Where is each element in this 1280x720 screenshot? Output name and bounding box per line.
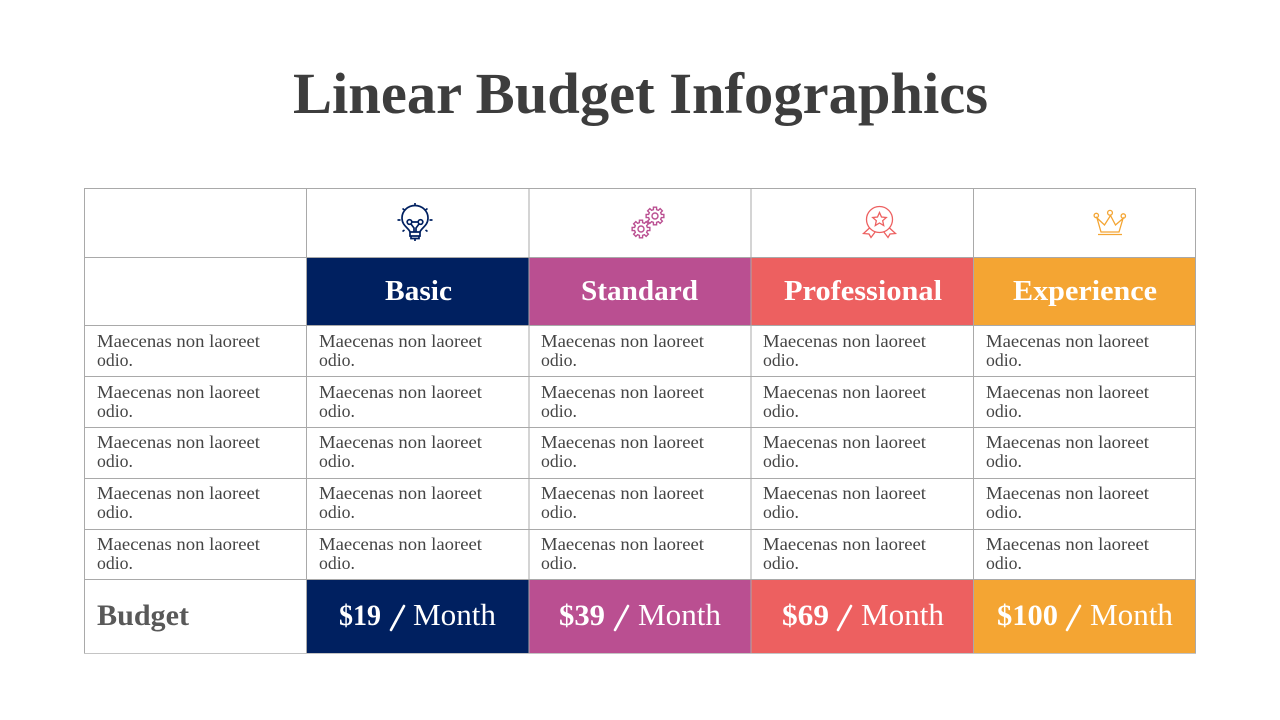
row 4 text xyxy=(97,483,1149,522)
row 3 text: Maecenas non laoreet xyxy=(319,432,482,452)
price: Professional: Month xyxy=(861,597,944,632)
budget row xyxy=(97,580,1196,654)
row 4 text: Maecenas non laoreet xyxy=(319,483,482,503)
row 1 text: odio. xyxy=(319,350,355,370)
price: Professional: $69 xyxy=(782,599,829,632)
row 3 text: odio. xyxy=(97,451,133,471)
title: Linear Budget Infographics xyxy=(293,61,988,126)
row 2 text: odio. xyxy=(763,401,799,421)
price: Standard: $39 xyxy=(559,599,605,632)
price: Basic: $19 xyxy=(339,599,381,632)
header: Professional xyxy=(751,258,974,326)
icon: award ribbon xyxy=(864,206,896,238)
price: Experience xyxy=(974,580,1196,654)
row 2 text: odio. xyxy=(97,401,133,421)
row 5 text: Maecenas non laoreet xyxy=(541,534,704,554)
row 4 text: Maecenas non laoreet xyxy=(97,483,260,503)
row 5 text: Maecenas non laoreet xyxy=(319,534,482,554)
price: Basic: Month xyxy=(413,597,496,632)
row 1 text: odio. xyxy=(986,350,1022,370)
row 4 text: Maecenas non laoreet xyxy=(541,483,704,503)
header: Experience: Experience xyxy=(1013,275,1157,307)
price: Experience: $100 xyxy=(997,599,1058,632)
row 2 text: Maecenas non laoreet xyxy=(97,382,260,402)
row 2 text: odio. xyxy=(319,401,355,421)
row 1 text: odio. xyxy=(763,350,799,370)
row 1 text: Maecenas non laoreet xyxy=(97,331,260,351)
row 3 text: Maecenas non laoreet xyxy=(986,432,1149,452)
price: Experience: Month xyxy=(1090,597,1173,632)
row 5 text: odio. xyxy=(319,553,355,573)
row 4 text: odio. xyxy=(319,502,355,522)
header: Basic xyxy=(306,258,529,326)
row 1 text: odio. xyxy=(97,350,133,370)
header: Professional: Professional xyxy=(784,275,942,307)
row 3 text xyxy=(97,432,1149,471)
row 3 text: Maecenas non laoreet xyxy=(763,432,926,452)
row 5 text: Maecenas non laoreet xyxy=(763,534,926,554)
row 1 text xyxy=(97,331,1149,370)
row 4 text: Maecenas non laoreet xyxy=(763,483,926,503)
row 1 text: Maecenas non laoreet xyxy=(319,331,482,351)
price: Standard xyxy=(529,580,751,654)
price: Basic xyxy=(306,580,529,654)
header: Standard: Standard xyxy=(581,275,698,307)
row 4 text: odio. xyxy=(763,502,799,522)
row 1 text: Maecenas non laoreet xyxy=(541,331,704,351)
row 1 text: odio. xyxy=(541,350,577,370)
icon: crown xyxy=(1094,210,1126,234)
row 1 text: Maecenas non laoreet xyxy=(986,331,1149,351)
icon: light bulb xyxy=(398,203,432,241)
row 3 text: odio. xyxy=(986,451,1022,471)
row 4 text: odio. xyxy=(541,502,577,522)
row 5 text: odio. xyxy=(986,553,1022,573)
row 2 text: odio. xyxy=(986,401,1022,421)
price: Professional xyxy=(751,580,974,654)
row 5 text: odio. xyxy=(541,553,577,573)
row 2 text: Maecenas non laoreet xyxy=(763,382,926,402)
header: Standard xyxy=(529,258,751,326)
row 2 text: Maecenas non laoreet xyxy=(319,382,482,402)
row 4 text: odio. xyxy=(986,502,1022,522)
row 3 text: odio. xyxy=(541,451,577,471)
row 5 text xyxy=(97,534,1149,573)
row 3 text: Maecenas non laoreet xyxy=(97,432,260,452)
row 1 text: Maecenas non laoreet xyxy=(763,331,926,351)
row 5 text: Maecenas non laoreet xyxy=(97,534,260,554)
price: Standard: Month xyxy=(638,597,721,632)
icon: gears xyxy=(632,207,664,238)
row 5 text: odio. xyxy=(97,553,133,573)
header colour cells xyxy=(306,258,1196,326)
budget label: Budget xyxy=(97,599,189,632)
row 3 text: odio. xyxy=(763,451,799,471)
row 3 text: Maecenas non laoreet xyxy=(541,432,704,452)
row 4 text: odio. xyxy=(97,502,133,522)
row 4 text: Maecenas non laoreet xyxy=(986,483,1149,503)
header: Experience xyxy=(974,258,1196,326)
row 2 text: Maecenas non laoreet xyxy=(541,382,704,402)
row 3 text: odio. xyxy=(319,451,355,471)
row 2 text xyxy=(97,382,1149,421)
row 2 text: Maecenas non laoreet xyxy=(986,382,1149,402)
header: Basic: Basic xyxy=(385,275,452,307)
row 2 text: odio. xyxy=(541,401,577,421)
row 5 text: Maecenas non laoreet xyxy=(986,534,1149,554)
row 5 text: odio. xyxy=(763,553,799,573)
